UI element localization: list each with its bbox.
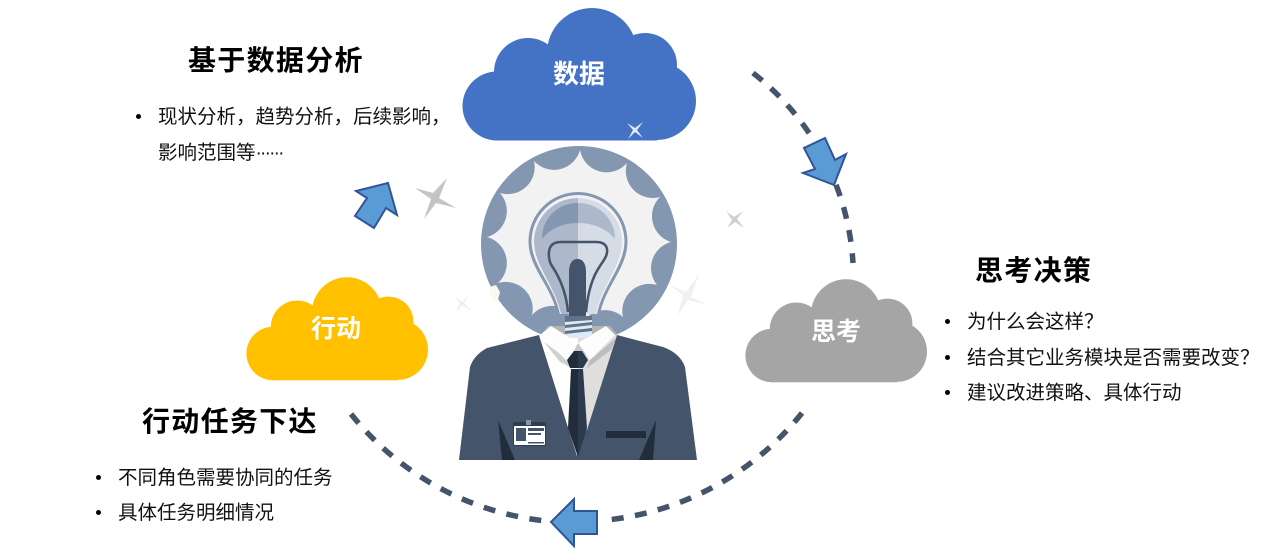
text block: data analysis: 影响范围等······ (158, 142, 283, 164)
heading: action tasks: 行动任务下达 (142, 406, 318, 437)
star: small right gray (726, 211, 744, 228)
star: upper left gray (415, 178, 456, 219)
dashed arc: thinking to action (607, 413, 802, 520)
lightbulb (528, 192, 628, 338)
cloud: thinking: 思考 (811, 318, 861, 346)
cloud: action (246, 277, 428, 380)
text block: data analysis (136, 106, 451, 164)
gear head (481, 146, 677, 342)
ID badge (513, 420, 546, 446)
cloud: data (462, 8, 696, 140)
text block: action tasks: 不同角色需要协同的任务 (118, 466, 333, 488)
heading: data analysis: 基于数据分析 (188, 45, 364, 76)
text block: thinking and decision (945, 311, 1260, 404)
text block: data analysis: 现状分析，趋势分析，后续影响， (158, 106, 451, 128)
arrow: bottom pointing left (551, 499, 597, 546)
text block: thinking and decision: 结合其它业务模块是否需要改变？ (967, 346, 1260, 368)
suit (459, 326, 697, 460)
text block: thinking and decision: 为什么会这样？ (967, 311, 1104, 333)
star: pale left (454, 295, 472, 312)
cloud: action: 行动 (311, 315, 361, 343)
text block: thinking and decision: 建议改进策略、具体行动 (967, 382, 1182, 404)
dashed arc: data to thinking (753, 73, 853, 263)
cloud: data: 数据 (553, 59, 605, 89)
arrow: right side pointing down (803, 138, 846, 185)
character: lightbulb-head businessman (459, 146, 697, 460)
star: pale right (670, 274, 708, 315)
heading: thinking and decision: 思考决策 (975, 255, 1092, 286)
text block: action tasks: 具体任务明细情况 (118, 502, 274, 524)
cloud: thinking (745, 279, 927, 382)
arrow: upper left pointing up-right (355, 183, 397, 228)
dashed arc: action to analysis (351, 414, 546, 521)
text block: action tasks (96, 466, 333, 524)
